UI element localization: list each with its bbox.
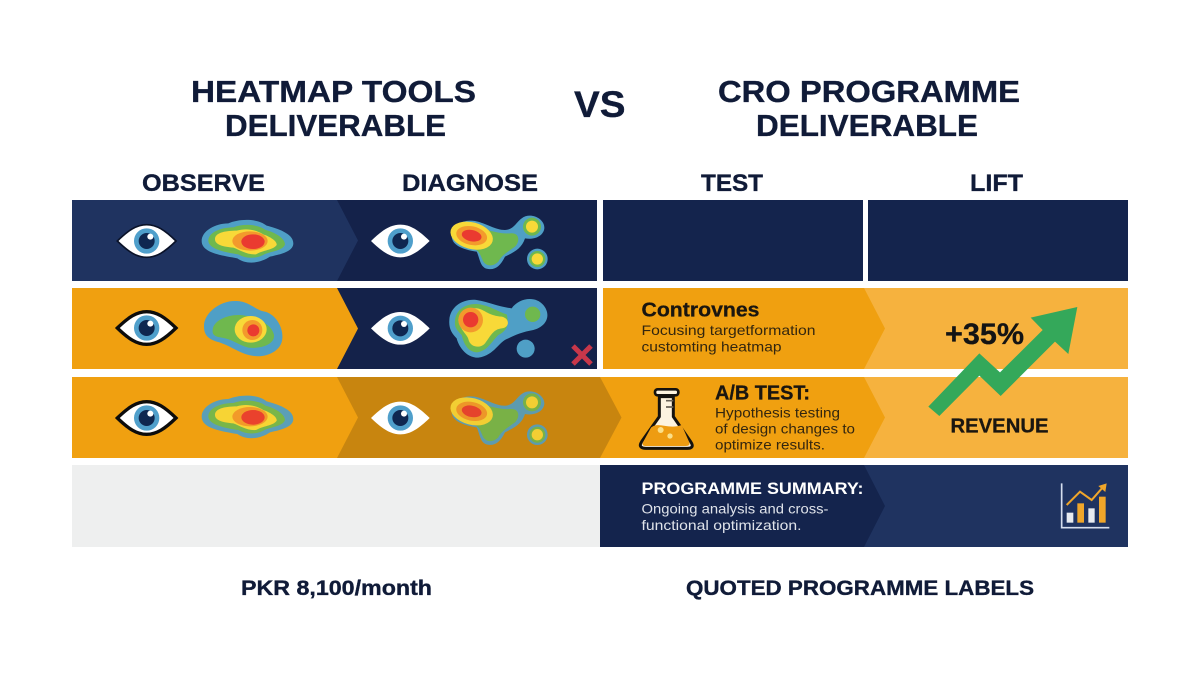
- text: programme summary body: Ongoing analysis and cross-: [642, 500, 829, 516]
- icon: eye observe row 1: [117, 225, 176, 257]
- panel: row 3 heatmap tools: [72, 377, 600, 458]
- title: CRO programme deliverable: DELIVERABLE: [756, 109, 978, 143]
- text: controvnes body: customting heatmap: [642, 338, 782, 354]
- text: A/B test body: of design changes to: [715, 420, 855, 436]
- panel: row 2 heatmap tools: [72, 288, 597, 369]
- column headings: [142, 170, 1023, 197]
- text: A/B test body: optimize results.: [715, 436, 825, 452]
- panel: row 4 left empty: [72, 465, 600, 547]
- title: CRO programme deliverable: [718, 75, 1020, 143]
- panel: lift empty: [868, 200, 1128, 281]
- column headings: TEST: [701, 170, 763, 197]
- heading: A/B test: A/B TEST:: [715, 382, 810, 404]
- title: heatmap tools deliverable: DELIVERABLE: [225, 109, 446, 143]
- panel: test empty: [603, 200, 863, 281]
- panel: programme summary: [600, 465, 1128, 547]
- text: A/B test body: Hypothesis testing: [715, 404, 840, 420]
- panel: controversies: [603, 288, 1128, 369]
- icon: eye observe row 3: [117, 402, 176, 434]
- title: heatmap tools deliverable: HEATMAP TOOLS: [191, 75, 476, 109]
- icon: eye diagnose row 1: [371, 225, 430, 257]
- column headings: LIFT: [970, 170, 1023, 197]
- heading: controvnes: Controvnes: [642, 298, 760, 322]
- stat: +35%: +35%: [945, 318, 1024, 351]
- icon: flask: [640, 389, 692, 448]
- icon: eye observe row 2: [117, 312, 176, 344]
- arrow: revenue growth: [928, 307, 1077, 416]
- caption: quoted programme labels: QUOTED PROGRAMME LABELS: [686, 577, 1034, 600]
- icon: heatmap observe row 2: [204, 301, 282, 356]
- title: versus: VS: [574, 84, 626, 125]
- label: revenue: REVENUE: [950, 416, 1048, 438]
- text: programme summary body: functional optimization.: [642, 517, 802, 533]
- icon: heatmap observe row 1: [202, 220, 293, 263]
- title: heatmap tools deliverable: [191, 75, 476, 143]
- icon: heatmap observe row 3: [202, 396, 293, 438]
- panel: row 1 heatmap tools: [72, 200, 597, 281]
- icon: bar chart: [1062, 483, 1109, 528]
- icon: heatmap diagnose row 3: [447, 391, 548, 445]
- text: controvnes body: [642, 322, 816, 354]
- heading: programme summary: PROGRAMME SUMMARY:: [642, 480, 864, 498]
- icon: heatmap diagnose row 1: [447, 216, 548, 269]
- column headings: DIAGNOSE: [402, 170, 538, 197]
- text: A/B test body: [715, 404, 855, 452]
- icon: red cross: [573, 346, 591, 364]
- icon: heatmap diagnose row 2: [449, 299, 547, 358]
- icon: eye diagnose row 3: [371, 402, 430, 434]
- title: CRO programme deliverable: CRO PROGRAMME: [718, 75, 1020, 109]
- text: controvnes body: Focusing targetformation: [642, 322, 816, 338]
- icon: eye diagnose row 2: [371, 312, 430, 345]
- text: programme summary body: [642, 500, 829, 533]
- panel: A/B test: [600, 377, 1128, 458]
- caption: price: PKR 8,100/month: [241, 577, 432, 600]
- column headings: OBSERVE: [142, 170, 265, 197]
